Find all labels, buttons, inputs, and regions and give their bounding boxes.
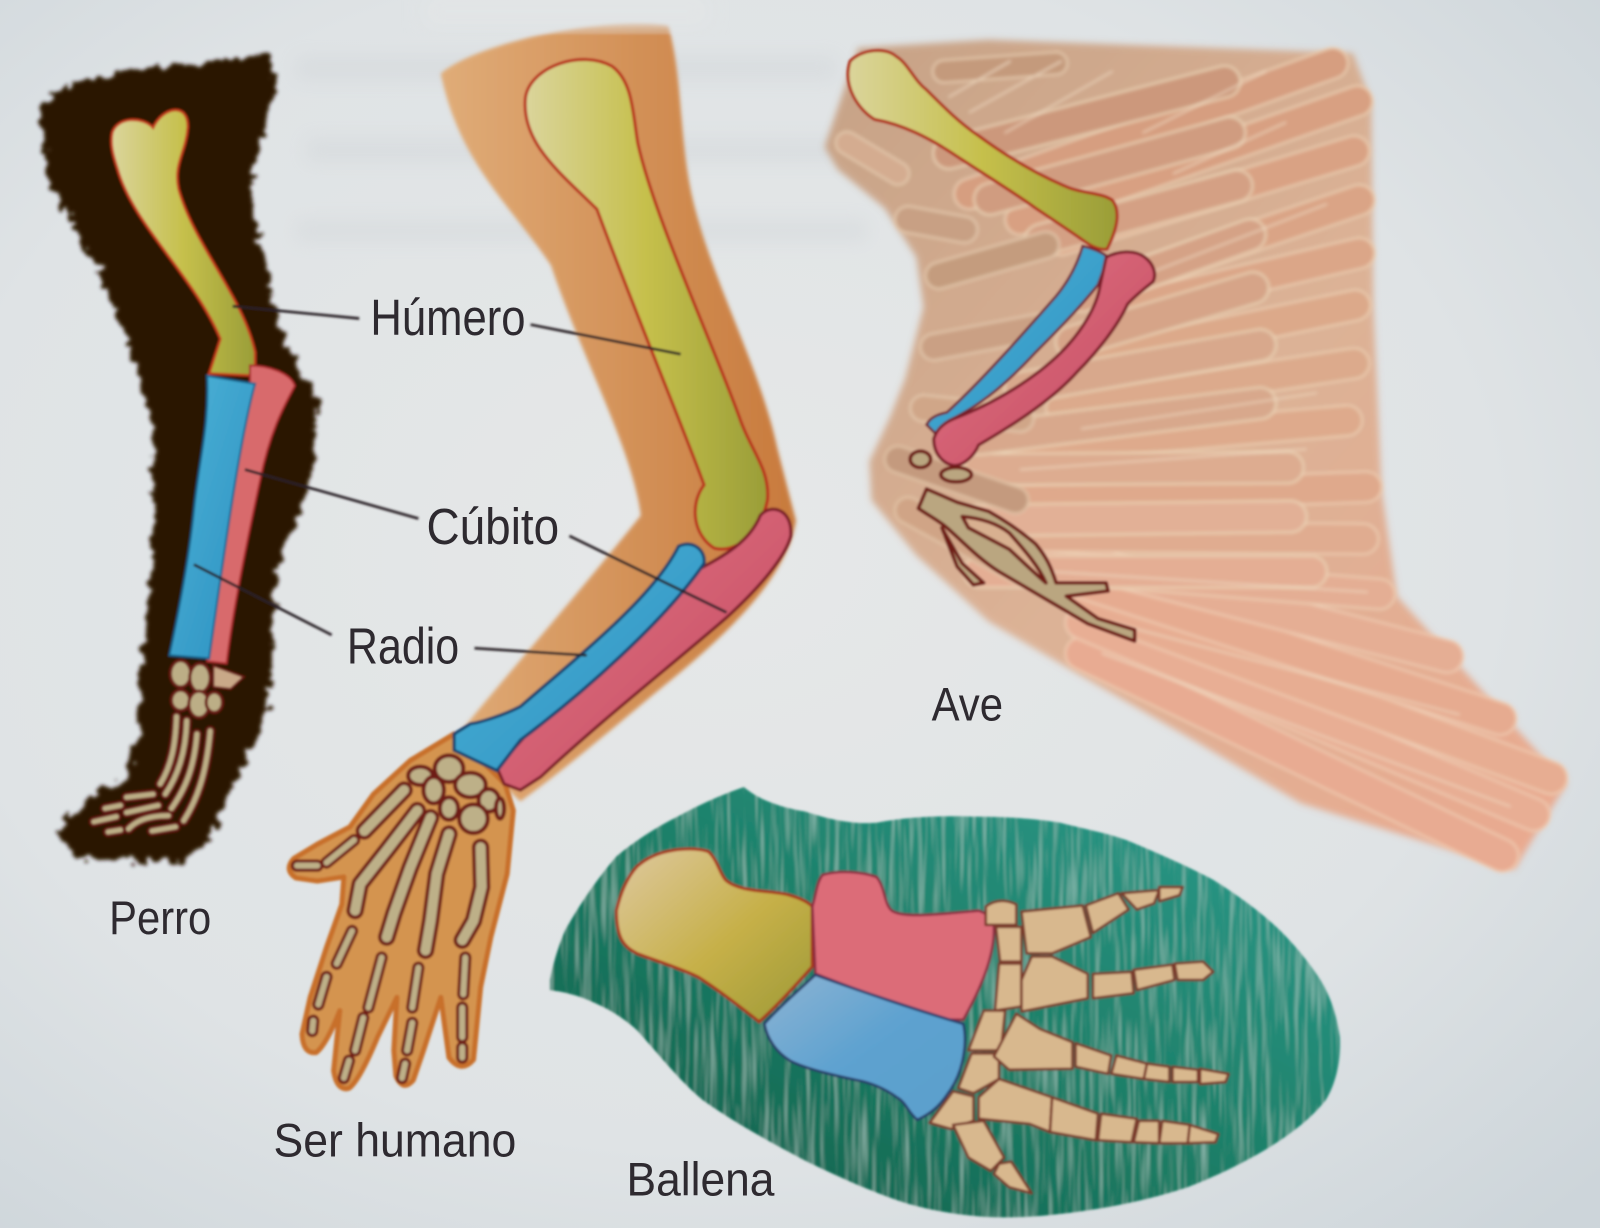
label: Húmero: Húmero [370,289,526,346]
human hand bones [297,755,504,1078]
label: Perro: Perro [109,892,211,944]
human arm skin [441,23,796,801]
covert feathers [949,82,1311,572]
bleed-through shading from reverse page [296,56,878,242]
dog radius [169,376,255,658]
label: Ballena: Ballena [627,1153,775,1205]
whale radius [764,975,965,1120]
human humerus [525,59,768,549]
whale ulna [812,872,994,1020]
whale skin [550,787,1340,1217]
whale humerus [616,849,812,1022]
whale digit bones [930,887,1229,1193]
wing base [824,40,1566,870]
dog humerus [111,110,255,376]
dog fur [41,53,318,864]
label: Ave: Ave [932,679,1003,731]
dog ulna [207,365,295,664]
bird wrist and hand bones [910,451,1135,641]
bird radius [927,246,1108,437]
lesser covert feathers [847,61,1510,806]
leader lines [194,306,727,655]
label: Radio: Radio [347,617,459,675]
bird ulna [934,252,1155,465]
dog limb [41,53,318,864]
label: Cúbito: Cúbito [427,498,559,555]
bird humerus [848,50,1117,249]
whale flipper [550,787,1340,1217]
fade at top of arm [423,0,709,28]
primary feathers [969,63,1551,855]
label: Ser humano: Ser humano [273,1115,516,1167]
dog paw bones [94,660,244,832]
human radius [454,544,704,771]
human ulna [497,509,791,790]
human limb [289,0,796,1089]
bird wing [824,40,1566,870]
human hand skin [289,734,513,1089]
